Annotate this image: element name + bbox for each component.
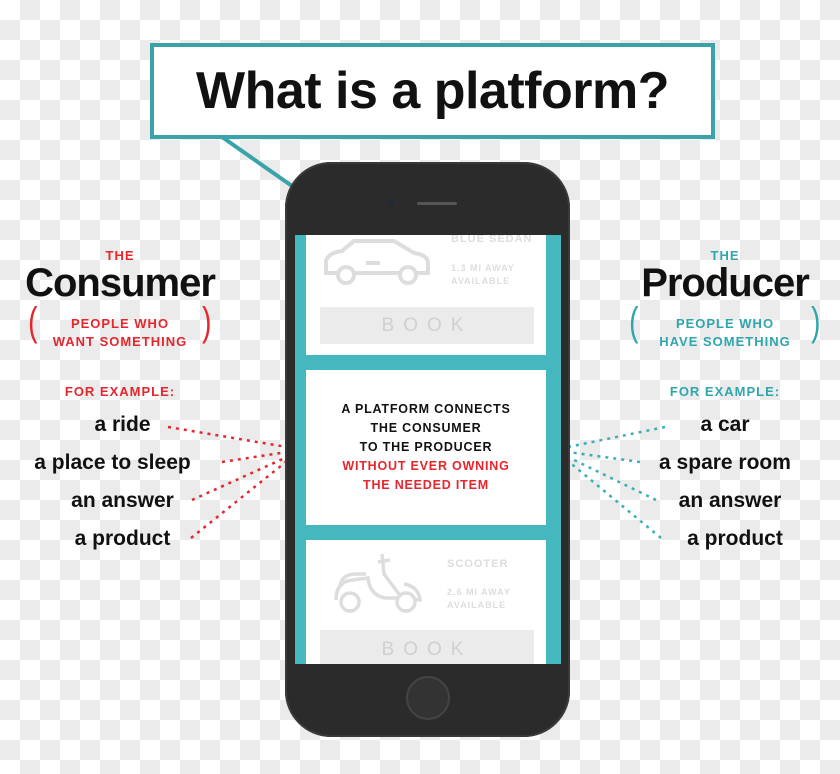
card: sedan [306,235,546,355]
card: scooter: BOOK [382,639,472,660]
text: an answer [679,489,781,512]
screen [295,235,561,664]
camera [388,200,394,206]
card: scooter: 2.6 MI AWAY [447,587,511,597]
consumer heading: ) [202,300,212,344]
title callout: What is a platform? [196,62,669,120]
card: scooter: SCOOTER [447,558,508,570]
title callout [150,43,715,139]
card: sedan: AVAILABLE [451,276,510,286]
text: a ride [94,413,151,436]
producer heading: HAVE SOMETHING [659,334,791,349]
consumer heading: ( [28,300,38,344]
card: sedan: 1.3 MI AWAY [451,263,515,273]
consumer items [34,413,191,550]
producer heading: Producer [641,261,809,305]
card: platform message: THE CONSUMER [370,421,481,435]
producer heading: PEOPLE WHO [676,316,774,331]
card: platform message: A PLATFORM CONNECTS [341,402,511,416]
producer heading: THE [710,248,740,263]
consumer heading: WANT SOMETHING [53,334,187,349]
producer for example: FOR EXAMPLE: [670,384,780,399]
card: scooter: AVAILABLE [447,600,506,610]
consumer heading: Consumer [25,261,215,305]
text: a car [700,413,750,436]
phone [285,162,570,737]
card: scooter [306,540,546,670]
producer heading: ) [811,300,821,344]
card: platform message: TO THE PRODUCER [360,440,492,454]
producer items [659,413,791,550]
card: platform message: WITHOUT EVER OWNING [342,459,510,473]
consumer heading: THE [106,248,134,263]
consumer heading: PEOPLE WHO [71,316,169,331]
card: platform message: THE NEEDED ITEM [363,478,489,492]
producer heading [629,248,821,349]
home button [406,676,450,720]
text: a spare room [659,451,791,474]
consumer heading [25,248,216,349]
text: a product [75,527,170,550]
text: an answer [71,489,174,512]
text: a place to sleep [34,451,191,474]
card: platform message [306,370,546,525]
producer heading: ( [629,300,639,344]
text: a product [687,527,783,550]
consumer for example: FOR EXAMPLE: [65,384,175,399]
card: sedan: BOOK [382,315,472,336]
